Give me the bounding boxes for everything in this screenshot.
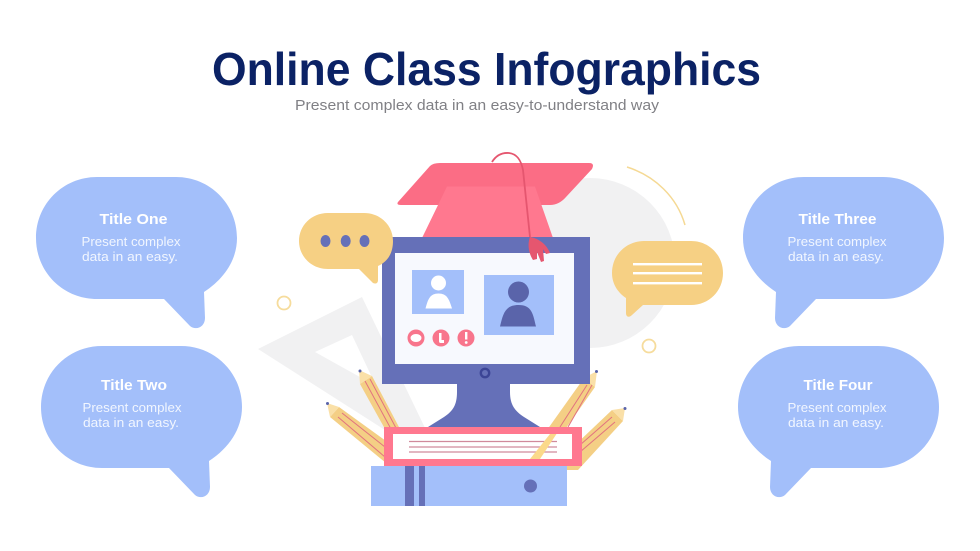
callout: title one: data in an easy. bbox=[82, 250, 178, 264]
pencil: far right bbox=[566, 407, 626, 470]
video tile: left user bbox=[412, 270, 464, 314]
monitor bbox=[382, 237, 590, 427]
top book bbox=[384, 427, 582, 466]
pencil crossing the book bbox=[530, 434, 556, 459]
book stack bbox=[371, 427, 582, 506]
bottom book bbox=[371, 466, 567, 506]
callout: title three: Title Three bbox=[798, 211, 876, 228]
callout: title two: Present complex bbox=[82, 401, 182, 415]
callout: title two: data in an easy. bbox=[83, 416, 179, 430]
pencil: far left bbox=[326, 402, 386, 463]
callout: title four: Title Four bbox=[804, 377, 873, 394]
graduation cap bbox=[397, 153, 593, 238]
title: Online Class Infographics bbox=[212, 43, 761, 95]
subtitle: Present complex data in an easy-to-understand way bbox=[295, 97, 660, 114]
decorative arc bbox=[627, 167, 685, 225]
callout: title one bbox=[36, 177, 237, 328]
callout: title four bbox=[738, 346, 939, 497]
video tile: right user bbox=[484, 275, 554, 335]
call button: alert bbox=[458, 330, 474, 346]
callout: title four: Present complex bbox=[788, 401, 887, 415]
background grey circle bbox=[505, 178, 675, 348]
callout: title two: Title Two bbox=[101, 377, 167, 394]
callout: title three: data in an easy. bbox=[788, 250, 884, 264]
chat bubble: dots bbox=[299, 213, 393, 284]
chat bubble: lines bbox=[612, 241, 723, 317]
call button: chat bbox=[408, 330, 424, 346]
callout: title four: data in an easy. bbox=[788, 416, 884, 430]
call button: phone bbox=[432, 330, 450, 346]
callout: title three: Present complex bbox=[788, 235, 887, 249]
callout: title two bbox=[41, 346, 242, 497]
callout: title one: Present complex bbox=[82, 235, 181, 249]
set square bbox=[258, 297, 426, 430]
small ring left bbox=[278, 296, 290, 310]
cap tassel bbox=[529, 237, 550, 262]
pencil: inner right bbox=[547, 370, 598, 438]
central illustration bbox=[258, 153, 723, 506]
small ring right bbox=[642, 340, 656, 352]
callout: title three bbox=[743, 177, 944, 328]
pencil: inner left bbox=[358, 370, 400, 429]
callout: title one: Title One bbox=[100, 211, 168, 228]
